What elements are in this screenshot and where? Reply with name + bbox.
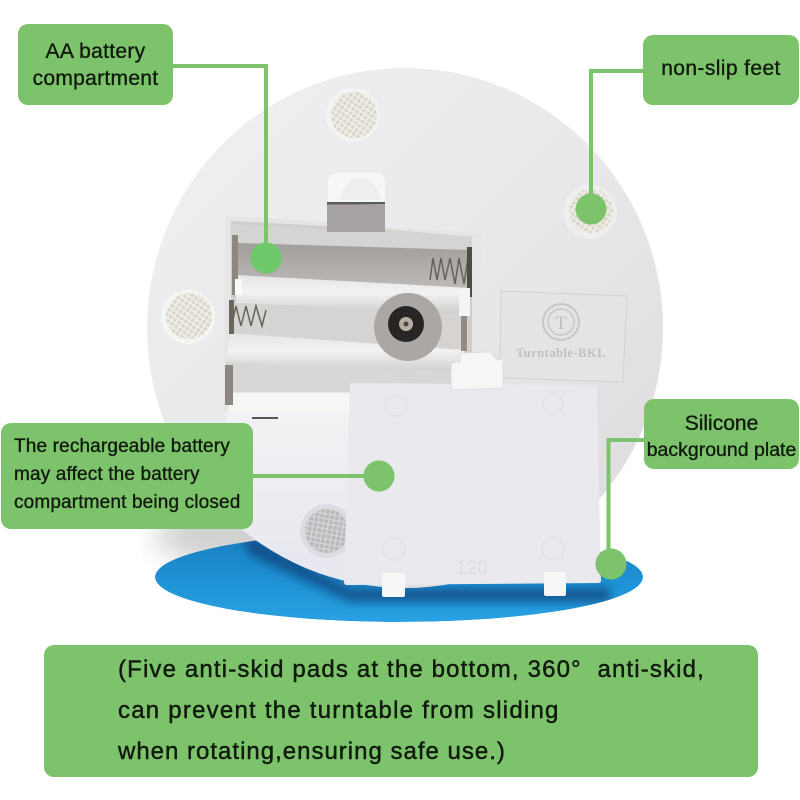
white body below compartment: [226, 412, 348, 580]
callout: anti-skid summary: can prevent the turntable from sliding: [118, 697, 560, 724]
callout: anti-skid summary: when rotating,ensuring safe use.): [118, 738, 506, 765]
battery compartment cover: [344, 383, 601, 585]
callout: rechargeable battery note: The rechargeable battery: [14, 436, 230, 457]
callout: anti-skid summary: (Five anti-skid pads at the bottom, 360° anti-skid,: [118, 656, 705, 683]
callout: silicone background plate: Silicone: [685, 412, 758, 435]
callout: AA battery compartment: AA battery: [46, 40, 145, 63]
cover top clip: [451, 352, 503, 390]
cover shadow: [433, 389, 517, 411]
turntable base disc: [147, 68, 663, 588]
connector: AA battery: [172, 64, 282, 274]
compartment lower lip: [226, 393, 350, 422]
anti-skid pad bottom: [300, 504, 354, 558]
connector: rechargeable battery: [250, 460, 394, 492]
model label plate: [500, 291, 627, 382]
anti-skid pad left: [161, 290, 215, 344]
callout: non-slip feet: [643, 35, 799, 105]
model label plate: T: [555, 313, 567, 334]
connector: non-slip feet: [576, 69, 644, 224]
product illustration: [147, 64, 663, 622]
silicone background plate: [155, 540, 643, 622]
callout: rechargeable battery note: [1, 423, 253, 529]
cover hinge tabs: [382, 572, 566, 597]
cast shadow on background: [155, 507, 295, 563]
connector: silicone plate: [596, 438, 645, 580]
anti-skid pad right: [563, 185, 617, 239]
callout: silicone background plate: [644, 399, 799, 469]
battery compartment cover: 120: [456, 558, 488, 579]
callout: rechargeable battery note: may affect the battery: [14, 464, 200, 485]
anti-skid pad top: [326, 88, 380, 142]
terminals and springs: [225, 235, 472, 405]
battery slot 2: [230, 303, 468, 350]
battery compartment: [224, 216, 481, 422]
tube divider 2: [228, 333, 464, 373]
callout: non-slip feet: non-slip feet: [661, 57, 781, 80]
callout: AA battery compartment: [18, 24, 173, 105]
callout: AA battery compartment: compartment: [33, 67, 158, 90]
battery slot 3: [226, 362, 460, 392]
callout: rechargeable battery note: compartment being closed: [14, 492, 240, 513]
cover latch slot: [327, 173, 385, 234]
callout: silicone background plate: background plate: [647, 439, 796, 461]
dc power socket: [374, 293, 442, 361]
tube divider 1: [236, 275, 470, 314]
model label plate: Turntable-BKL: [516, 346, 606, 360]
body slit: [252, 417, 278, 419]
battery slot 1: [234, 243, 470, 290]
callout: anti-skid summary: [44, 645, 758, 777]
